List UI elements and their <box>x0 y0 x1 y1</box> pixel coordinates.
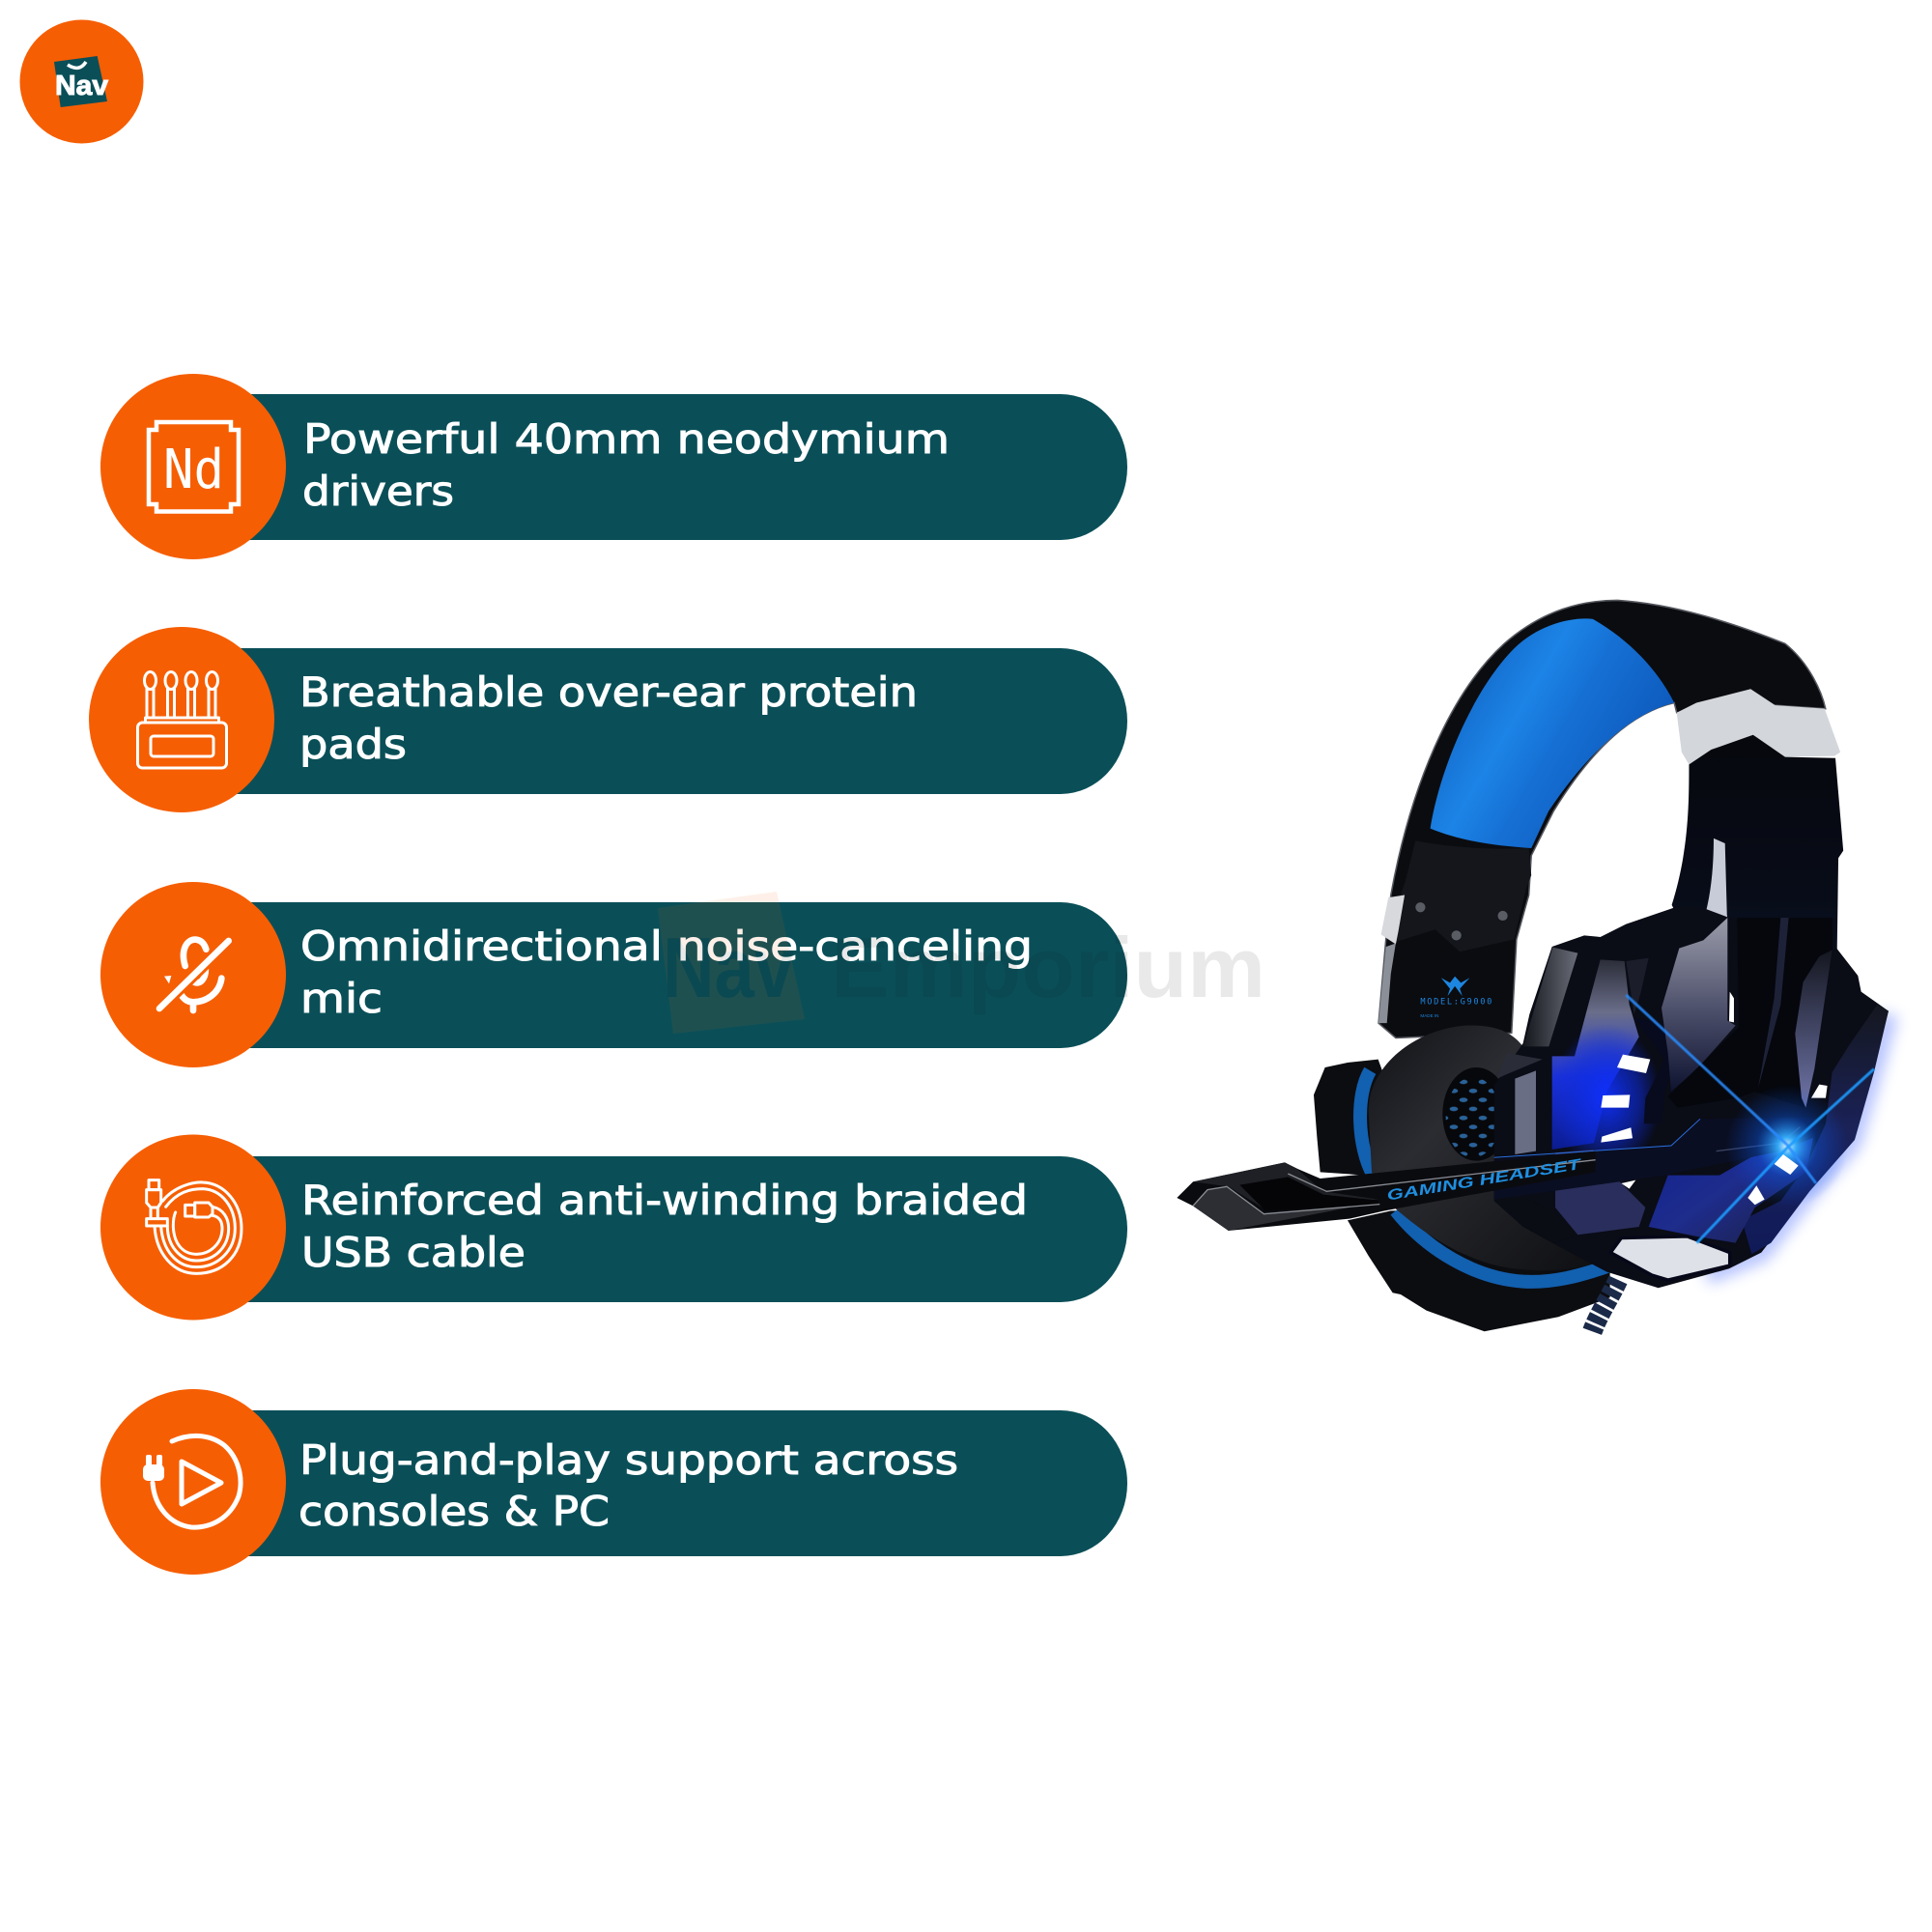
right flap <box>1742 1005 1889 1254</box>
white sliver <box>1729 992 1734 1022</box>
feature row 2: protein pads <box>89 627 1127 812</box>
soft outer glow <box>1707 1014 1889 1275</box>
text: plug and play support: consoles & PC <box>298 1488 610 1535</box>
left slider plate <box>1378 840 1531 1023</box>
text: powerful drivers <box>302 415 950 515</box>
text: reinforced cable <box>301 1177 1028 1276</box>
watermark: Nav Emporium: Nav <box>663 920 794 1015</box>
icon: Nd element <box>149 422 239 512</box>
right earcup <box>1494 906 1889 1331</box>
icon: Nd element: Nd <box>163 439 224 501</box>
dark notch facet <box>1634 1017 1679 1123</box>
feature row 4: braided USB cable <box>100 1134 1127 1320</box>
speaker mesh <box>1442 1067 1510 1161</box>
left frame facet <box>1523 948 1577 1046</box>
silver control plate <box>1610 1236 1730 1280</box>
text: omnidirectional mic <box>300 923 1033 1022</box>
cable <box>1592 1280 1618 1331</box>
logo badge: Nav <box>55 71 108 101</box>
text: plug and play support: Plug-and-play support across <box>299 1436 958 1484</box>
boom right section <box>1494 1118 1816 1200</box>
watermark: Nav Emporium: Emporium <box>831 920 1265 1015</box>
text: plug and play support <box>298 1436 958 1535</box>
small lower-left facets <box>1497 1053 1543 1079</box>
product image: gaming headset <box>1177 600 1889 1331</box>
right arm <box>1672 735 1843 964</box>
watermark: Nav Emporium <box>658 892 1265 1034</box>
feature row 3: noise-canceling mic <box>100 882 1127 1067</box>
central panel with blue light <box>1552 959 1639 1150</box>
ear cushion <box>1369 1025 1610 1270</box>
feature row 5: plug and play <box>100 1389 1127 1575</box>
arm silver highlight <box>1704 838 1733 964</box>
text: powerful drivers: Powerful 40mm neodymium <box>303 415 950 463</box>
icon: coiled USB cable <box>147 1180 242 1273</box>
grey ridge panel <box>1662 918 1736 1092</box>
model label: MADE IN <box>1420 1013 1438 1018</box>
lower panel <box>1649 1123 1816 1243</box>
silver band strip <box>1677 689 1840 764</box>
dark upper facet <box>1626 958 1649 1014</box>
arm panel <box>1795 950 1833 1108</box>
icon: ear pads with swabs <box>137 672 226 768</box>
model label <box>1420 977 1492 1018</box>
headband <box>1378 600 1826 1037</box>
icon: muted microphone <box>159 940 229 1010</box>
blue ring <box>1360 1070 1610 1282</box>
text: reinforced cable: Reinforced anti-winding braided <box>301 1177 1028 1224</box>
text: over-ear pads: Breathable over-ear protein <box>299 668 918 716</box>
arm lower section <box>1668 918 1833 1108</box>
text: omnidirectional mic: Omnidirectional noise-canceling <box>300 923 1033 970</box>
lens flare <box>1626 995 1874 1243</box>
icon: plug and play <box>143 1435 241 1527</box>
boom label: GAMING HEADSET <box>1386 1156 1584 1205</box>
text: powerful drivers: drivers <box>302 468 454 515</box>
text: reinforced cable: USB cable <box>301 1229 526 1276</box>
logo badge <box>19 19 143 143</box>
text: omnidirectional mic: mic <box>300 975 383 1022</box>
LED lights <box>1601 1055 1828 1189</box>
blue headband pad <box>1431 618 1674 848</box>
model label: MODEL:G9000 <box>1420 997 1492 1007</box>
left earcup <box>1314 1025 1610 1331</box>
microphone boom <box>1177 1151 1596 1231</box>
text: over-ear pads: pads <box>299 721 407 768</box>
text: over-ear pads <box>299 668 918 768</box>
lower shell <box>1348 1208 1610 1331</box>
upper shell <box>1314 1060 1391 1176</box>
blue LED glow <box>1552 1024 1662 1172</box>
feature row 1: neodymium drivers <box>100 374 1127 559</box>
headband and upper arm <box>1378 600 1843 1037</box>
shell silhouette <box>1494 906 1889 1288</box>
